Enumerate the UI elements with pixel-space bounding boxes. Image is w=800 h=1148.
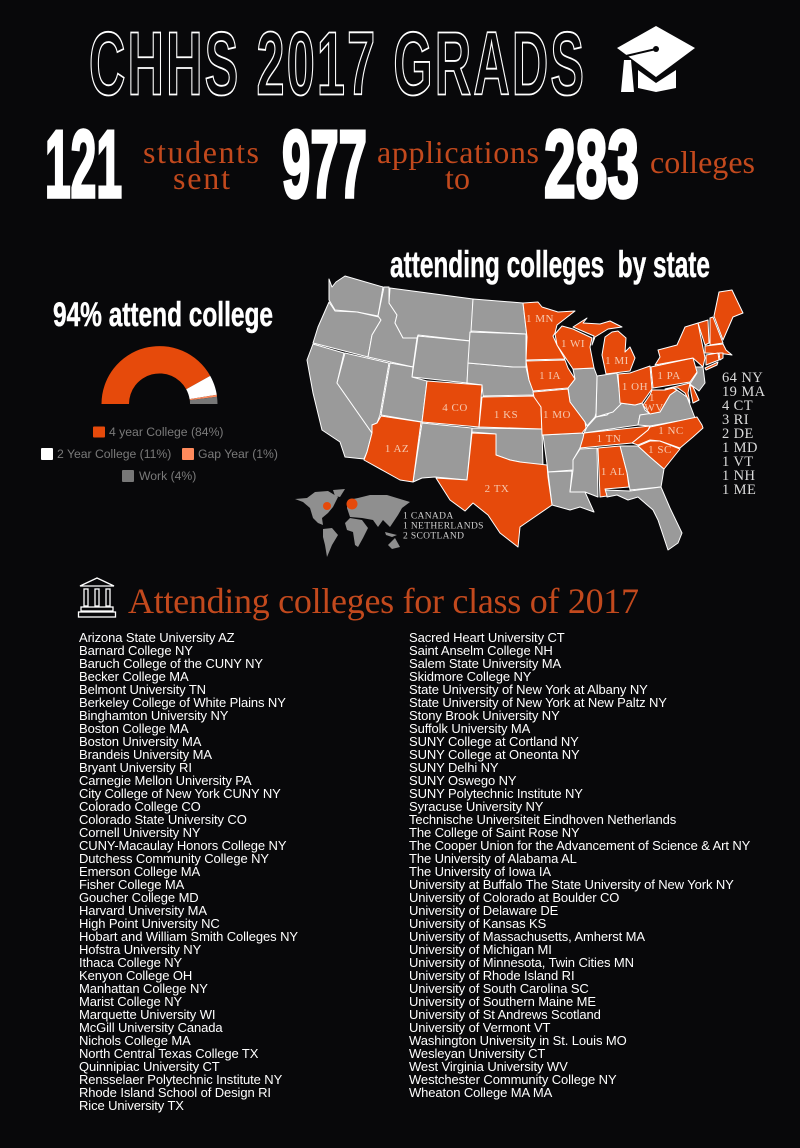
college list: left column: Marquette University WI: [79, 1007, 215, 1022]
college list: right column: SUNY College at Cortland NY: [409, 734, 579, 749]
map labels: 1 AL: [601, 466, 625, 478]
college list: right column: SUNY College at Oneonta NY: [409, 747, 580, 762]
college list: right column: [409, 630, 750, 1100]
college list: right column: University at Buffalo The State University of New York NY: [409, 877, 734, 892]
college list: left column: Bryant University RI: [79, 760, 192, 775]
college list: left column: Dutchess Community College NY: [79, 851, 269, 866]
college list: right column: West Virginia University WV: [409, 1059, 568, 1074]
label: applications to: applications: [377, 134, 539, 170]
state totals list: 1 ME: [722, 482, 756, 498]
college list: right column: Westchester Community College NY: [409, 1072, 617, 1087]
college list: right column: University of Rhode Island RI: [409, 968, 574, 983]
college list: left column: North Central Texas College TX: [79, 1046, 258, 1061]
state totals list: 2 DE: [722, 426, 754, 442]
college list: right column: The University of Iowa IA: [409, 864, 551, 879]
international totals: [403, 512, 484, 542]
state totals list: 3 RI: [722, 412, 749, 428]
college list: right column: Technische Universiteit Eindhoven Netherlands: [409, 812, 676, 827]
map labels: [385, 313, 684, 495]
college list: left column: Quinnipiac University CT: [79, 1059, 220, 1074]
icon: graduation cap: [617, 26, 695, 92]
college list: right column: SUNY Oswego NY: [409, 773, 516, 788]
college list: left column: Rhode Island School of Design RI: [79, 1085, 271, 1100]
college list: right column: Syracuse University NY: [409, 799, 543, 814]
college list: left column: CUNY-Macaulay Honors College NY: [79, 838, 286, 853]
college list: left column: Berkeley College of White Plains NY: [79, 695, 286, 710]
college list: right column: Salem State University MA: [409, 656, 561, 671]
college list: right column: University of Colorado at Boulder CO: [409, 890, 619, 905]
icon: college building: [78, 578, 116, 617]
college list: right column: Sacred Heart University CT: [409, 630, 565, 645]
college list: left column: Colorado State University CO: [79, 812, 247, 827]
college list: left column: Fisher College MA: [79, 877, 184, 892]
stat: 283: 283: [544, 111, 639, 218]
college list: left column: Rensselaer Polytechnic Institute NY: [79, 1072, 282, 1087]
college list: right column: Stony Brook University NY: [409, 708, 560, 723]
college list: left column: Manhattan College NY: [79, 981, 208, 996]
heading: attending colleges for class of 2017: Attending colleges for class of 2017: [128, 581, 639, 621]
college list: left column: Belmont University TN: [79, 682, 206, 697]
state totals list: 64 NY: [722, 370, 763, 386]
college list: right column: University of St Andrews Scotland: [409, 1007, 601, 1022]
college list: right column: Saint Anselm College NH: [409, 643, 553, 658]
college list: left column: Emerson College MA: [79, 864, 200, 879]
map labels: 1 PA: [657, 370, 681, 382]
college list: right column: Suffolk University MA: [409, 721, 530, 736]
college list: right column: University of Michigan MI: [409, 942, 552, 957]
label: applications to: [377, 134, 539, 196]
college list: left column: Marist College NY: [79, 994, 182, 1009]
map labels: 1 WI: [561, 338, 585, 350]
college list: right column: Skidmore College NY: [409, 669, 531, 684]
college list: right column: The College of Saint Rose NY: [409, 825, 580, 840]
college list: left column: Barnard College NY: [79, 643, 193, 658]
college list: right column: University of Massachusetts, Amherst MA: [409, 929, 645, 944]
college list: left column: Boston College MA: [79, 721, 189, 736]
map: world: [295, 489, 410, 557]
college list: left column: High Point University NC: [79, 916, 220, 931]
label: students sent: [143, 134, 259, 196]
state totals list: 1 NH: [722, 468, 756, 484]
legend: Gap Year (1%): [198, 447, 278, 461]
state totals list: 1 VT: [722, 454, 754, 470]
college list: right column: Wheaton College MA MA: [409, 1085, 552, 1100]
college list: right column: University of Kansas KS: [409, 916, 546, 931]
map: United States: [307, 276, 743, 550]
label: applications to: to: [445, 160, 470, 196]
college list: left column: Baruch College of the CUNY NY: [79, 656, 263, 671]
state totals list: 19 MA: [722, 384, 766, 400]
college list: right column: SUNY Polytechnic Institute NY: [409, 786, 583, 801]
map labels: WV: [644, 402, 664, 414]
college list: left column: [79, 630, 298, 1113]
college list: left column: Colorado College CO: [79, 799, 201, 814]
map labels: 1 OH: [622, 381, 648, 393]
map labels: 1 TN: [597, 433, 621, 445]
label: students sent: sent: [173, 160, 230, 196]
college list: left column: Binghamton University NY: [79, 708, 228, 723]
college list: left column: Nichols College MA: [79, 1033, 191, 1048]
map labels: 1 NC: [658, 425, 684, 437]
map labels: 1 IA: [539, 370, 561, 382]
college list: right column: Wesleyan University CT: [409, 1046, 545, 1061]
college list: left column: Hofstra University NY: [79, 942, 201, 957]
college list: left column: Kenyon College OH: [79, 968, 192, 983]
legend: 4 year College (84%): [109, 425, 223, 439]
college list: right column: University of Delaware DE: [409, 903, 558, 918]
label: colleges: colleges: [650, 144, 755, 180]
label: students sent: students: [143, 134, 259, 170]
college list: right column: SUNY Delhi NY: [409, 760, 498, 775]
college list: right column: University of Minnesota, Twin Cities MN: [409, 955, 634, 970]
international totals: 1 NETHERLANDS: [403, 522, 484, 532]
college list: left column: Brandeis University MA: [79, 747, 212, 762]
map labels: 1 MO: [543, 409, 571, 421]
college list: left column: Arizona State University AZ: [79, 630, 235, 645]
college list: left column: Cornell University NY: [79, 825, 200, 840]
text: 121: [45, 111, 122, 218]
college list: right column: University of Vermont VT: [409, 1020, 550, 1035]
map labels: 1: [649, 392, 655, 404]
college list: right column: Washington University in St. Louis MO: [409, 1033, 627, 1048]
college list: left column: Ithaca College NY: [79, 955, 182, 970]
state totals list: 4 CT: [722, 398, 753, 414]
map labels: 1 AZ: [385, 443, 409, 455]
map labels: 1 KS: [494, 409, 518, 421]
map labels: 4 CO: [442, 402, 468, 414]
college list: left column: City College of New York CUNY NY: [79, 786, 281, 801]
college list: left column: Goucher College MD: [79, 890, 199, 905]
map labels: 1 MI: [605, 355, 629, 367]
college list: left column: Becker College MA: [79, 669, 189, 684]
state totals list: [722, 370, 766, 498]
legend: 2 Year College (11%): [57, 447, 171, 461]
college list: right column: State University of New York at New Paltz NY: [409, 695, 667, 710]
college list: right column: State University of New York at Albany NY: [409, 682, 648, 697]
college list: left column: Carnegie Mellon University PA: [79, 773, 251, 788]
college list: left column: Hobart and William Smith Colleges NY: [79, 929, 298, 944]
international totals: 2 SCOTLAND: [403, 532, 464, 542]
heading: 94% attend college: 94% attend college: [53, 296, 273, 334]
college list: right column: University of South Carolina SC: [409, 981, 589, 996]
title: CHHS 2017 GRADS: [89, 14, 584, 114]
map labels: 2 TX: [485, 483, 509, 495]
legend: Work (4%): [139, 469, 196, 483]
chart: half donut: [102, 346, 218, 404]
state totals list: 1 MD: [722, 440, 758, 456]
legend: [41, 425, 278, 483]
stat: 977: 977: [282, 111, 367, 218]
college list: right column: The University of Alabama AL: [409, 851, 577, 866]
college list: left column: McGill University Canada: [79, 1020, 223, 1035]
college list: left column: Harvard University MA: [79, 903, 207, 918]
map labels: 1 MN: [526, 313, 554, 325]
college list: right column: The Cooper Union for the Advancement of Science & Art NY: [409, 838, 750, 853]
college list: left column: Boston University MA: [79, 734, 201, 749]
map labels: 1 SC: [648, 444, 672, 456]
college list: left column: Rice University TX: [79, 1098, 184, 1113]
college list: right column: University of Southern Maine ME: [409, 994, 596, 1009]
international totals: 1 CANADA: [403, 512, 454, 522]
